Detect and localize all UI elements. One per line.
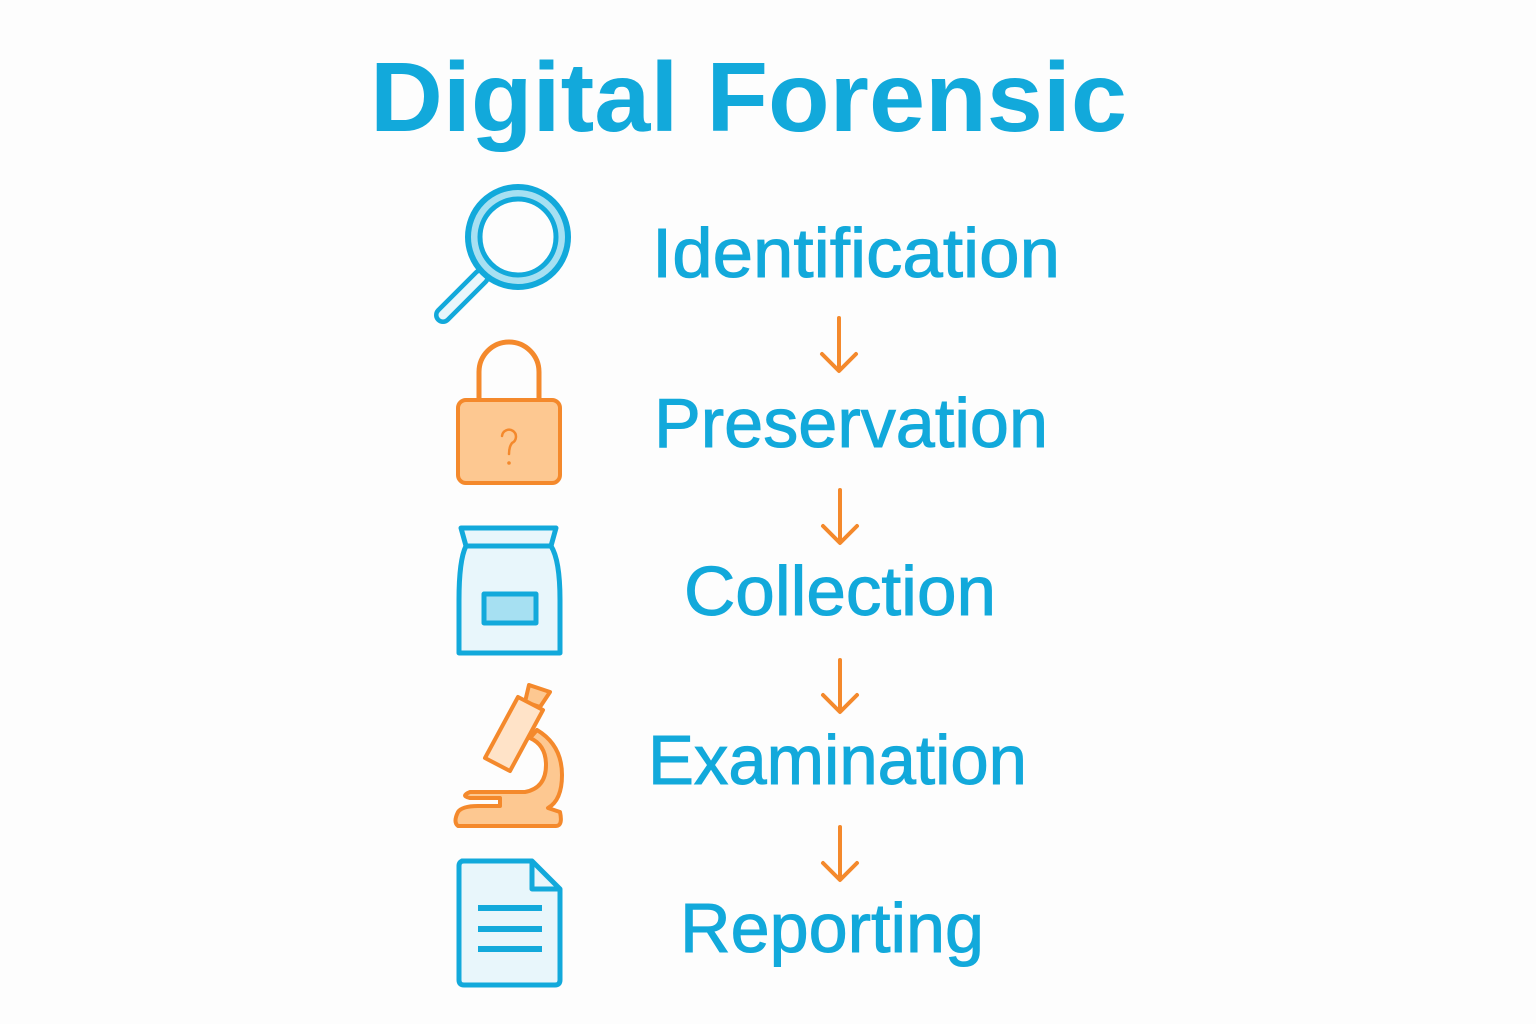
label: Preservation: Preservation [654,384,1048,462]
label: Identification: Identification [652,214,1060,292]
title: Digital Forensic [370,42,1127,152]
arrow 4 [823,827,857,880]
icon: magnifier [443,187,568,315]
label: Examination: Examination [648,721,1027,799]
arrow 2 [823,490,857,543]
label: Collection: Collection [684,552,996,630]
label: Reporting: Reporting [680,889,984,967]
icon: evidence bag [459,528,560,653]
icon: document [459,861,560,985]
arrow 3 [823,660,857,712]
arrow 1 [822,318,856,371]
icon: lock [458,342,560,483]
icon: microscope [456,685,562,826]
